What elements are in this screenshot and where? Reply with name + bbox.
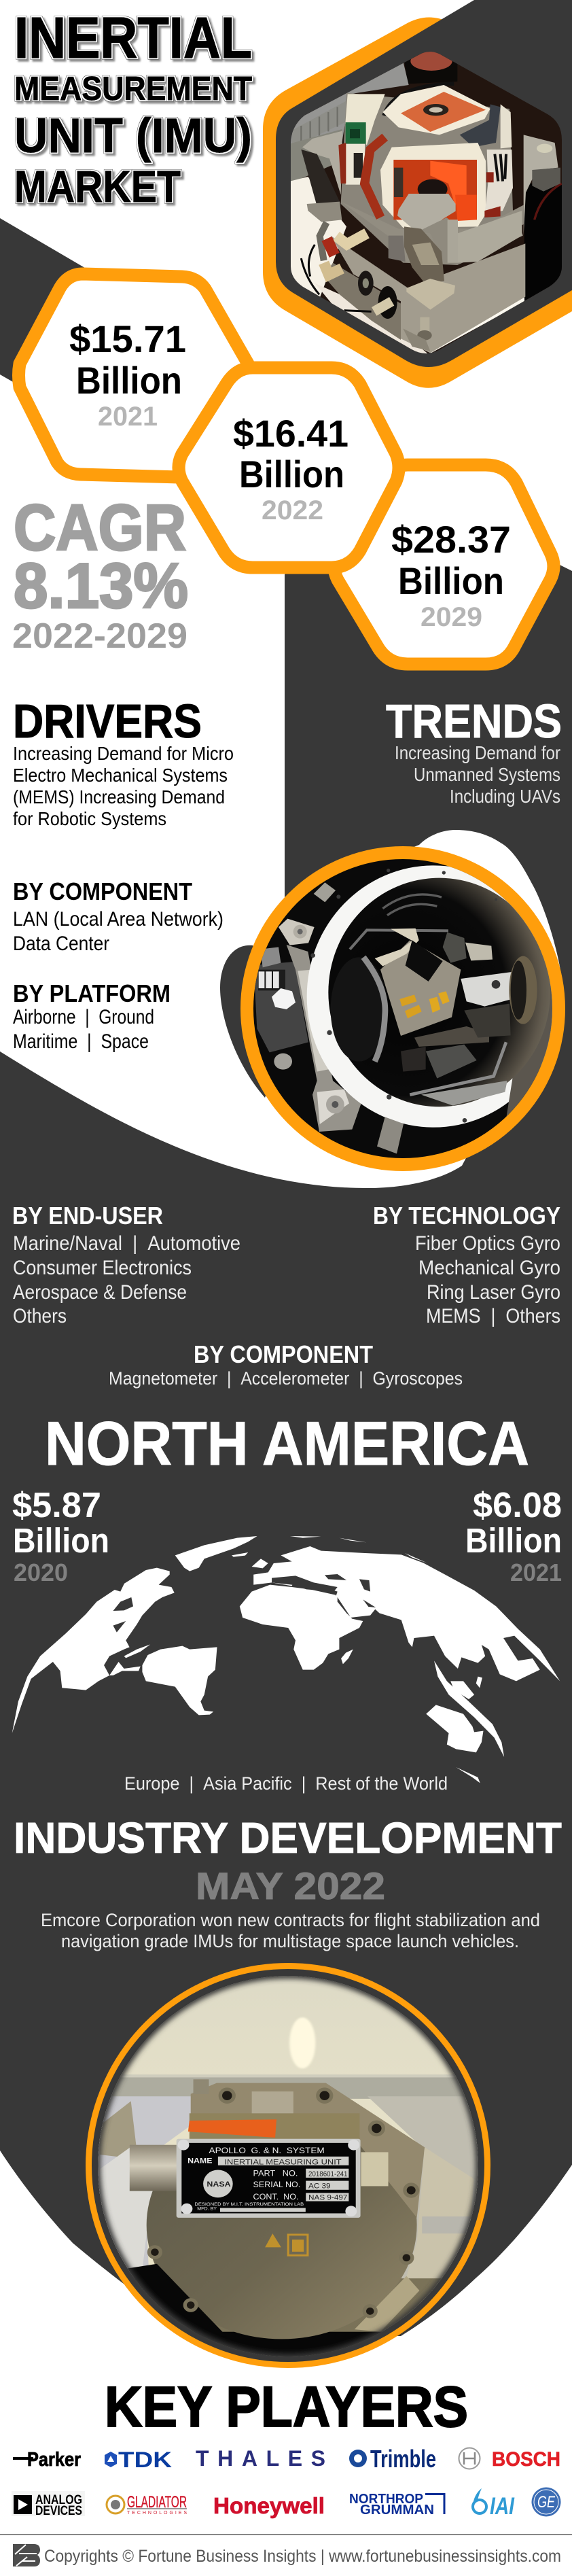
- dark blob left of circle: [220, 945, 292, 1098]
- industry development description: navigation grade IMUs for multistage space launch vehicles.: [61, 1931, 519, 1951]
- logo: IAI: [473, 2488, 515, 2520]
- key players heading: KEY PLAYERS: [105, 2375, 468, 2439]
- circular photo: Apollo IMU nameplate: NAS 9-497: [308, 2194, 347, 2201]
- circular photo: Apollo IMU nameplate: CONT. NO.: [253, 2192, 299, 2201]
- left dark triangle: [0, 218, 88, 383]
- circular photo: Apollo IMU nameplate: DESIGNED BY M.I.T. INSTRUMENTATION LAB: [194, 2202, 304, 2207]
- circular photo: Apollo IMU nameplate: APOLLO G. & N. SYSTEM: [209, 2146, 325, 2155]
- north america 2021 value: [465, 1486, 562, 1586]
- market size hexagon: 2021: $15.71: [69, 317, 186, 360]
- north america 2020 value: [12, 1486, 109, 1586]
- by end-user: Aerospace & Defense: [13, 1281, 187, 1304]
- circular photo: Apollo IMU nameplate: 2018601-241: [308, 2170, 347, 2178]
- logo: Northrop Grumman: NORTHROP: [349, 2492, 423, 2507]
- by component (network): LAN (Local Area Network): [13, 908, 224, 930]
- title: [14, 6, 252, 211]
- logo: Bosch: [459, 2448, 560, 2471]
- north america 2021 value: $6.08: [473, 1486, 562, 1525]
- market size hexagon: 2029: Billion: [398, 559, 504, 602]
- by platform: BY PLATFORM: [13, 979, 171, 1007]
- north america 2020 value: Billion: [13, 1521, 109, 1560]
- by technology: MEMS | Others: [426, 1305, 560, 1327]
- logo: General Electric: [531, 2488, 561, 2516]
- north america 2021 value: Billion: [465, 1521, 562, 1560]
- circular photo: Apollo IMU nameplate: AC 39: [308, 2182, 331, 2190]
- by component (sensors): Magnetometer | Accelerometer | Gyroscopes: [109, 1368, 463, 1389]
- north america 2021 value: 2021: [510, 1559, 562, 1586]
- by component (network): BY COMPONENT: [13, 877, 192, 905]
- market size hexagon: 2021: 2021: [98, 402, 158, 432]
- logo: Analog Devices: DEVICES: [35, 2504, 82, 2518]
- north america 2020 value: 2020: [14, 1559, 68, 1586]
- by end-user: Others: [13, 1305, 67, 1327]
- drivers: Increasing Demand for Micro: [13, 743, 234, 764]
- logo: IAI: IAI: [490, 2493, 515, 2520]
- trends: [386, 695, 562, 807]
- market size hexagon: 2022: [179, 368, 399, 568]
- by platform: Maritime | Space: [13, 1030, 149, 1053]
- by technology: Ring Laser Gyro: [427, 1281, 560, 1304]
- market size hexagon: 2022: Billion: [239, 453, 344, 495]
- logo: Bosch: BOSCH: [492, 2448, 560, 2471]
- circular photo: gimbal interior: [238, 843, 571, 1176]
- CAGR block: [12, 491, 188, 656]
- market size hexagon: 2022: 2022: [262, 495, 323, 525]
- market size hexagon: 2021: [19, 274, 251, 477]
- circular photo: Apollo IMU nameplate: MFD. BY: [197, 2207, 217, 2211]
- by platform: Airborne | Ground: [13, 1006, 154, 1028]
- title: MEASUREMENT: [14, 71, 252, 107]
- north america heading: NORTH AMERICA: [45, 1410, 529, 1478]
- logo: Northrop Grumman: GRUMMAN: [360, 2503, 434, 2518]
- circular photo: Apollo IMU nameplate: NAME: [187, 2156, 213, 2165]
- CAGR block: 2022-2029: [12, 616, 187, 656]
- by component (sensors): [109, 1340, 463, 1389]
- logo: Analog Devices: [12, 2491, 85, 2518]
- circular photo: Apollo IMU nameplate: SERIAL NO.: [253, 2180, 300, 2189]
- drivers: Electro Mechanical Systems: [13, 765, 228, 786]
- top right hexagon frame: [263, 0, 572, 388]
- drivers: (MEMS) Increasing Demand: [13, 786, 225, 807]
- footer divider: [0, 2534, 572, 2535]
- title: MARKET: [14, 161, 181, 211]
- logo: Trimble: Trimble: [370, 2445, 436, 2473]
- industry development description: [41, 1910, 540, 1951]
- north america 2020 value: $5.87: [12, 1486, 101, 1525]
- logo: Honeywell: Honeywell: [213, 2493, 325, 2518]
- by component (sensors): BY COMPONENT: [194, 1340, 373, 1368]
- date: MAY 2022: [196, 1864, 385, 1907]
- regions list: Europe | Asia Pacific | Rest of the World: [124, 1773, 448, 1794]
- logo: Thales: THALES: [196, 2446, 325, 2471]
- market size hexagon: 2022: $16.41: [233, 412, 348, 455]
- circular photo: Apollo IMU nameplate: INERTIAL MEASURING UNIT: [224, 2157, 342, 2166]
- by end-user: Consumer Electronics: [13, 1257, 192, 1279]
- drivers: for Robotic Systems: [13, 808, 166, 829]
- CAGR block: CAGR: [14, 491, 186, 564]
- circular photo: Apollo IMU nameplate: [82, 1951, 489, 2365]
- title: INERTIAL: [14, 6, 252, 71]
- logo: TDK: TDK: [118, 2448, 172, 2472]
- industry development heading: INDUSTRY DEVELOPMENT: [14, 1813, 562, 1862]
- CAGR block: 8.13%: [14, 550, 188, 621]
- drivers: [13, 695, 234, 829]
- market size hexagon: 2021: Billion: [76, 359, 182, 402]
- photo: IMU with gimbal in hexagon: [285, 48, 571, 360]
- market size hexagon: 2029: [334, 465, 554, 664]
- logo: Parker: Parker: [27, 2449, 81, 2471]
- footer logo: [13, 2544, 40, 2566]
- logo: Analog Devices: ANALOG: [35, 2493, 82, 2507]
- by end-user: Marine/Naval | Automotive: [13, 1232, 240, 1255]
- logo: Trimble: [349, 2445, 436, 2473]
- circular photo: Apollo IMU nameplate: PART NO.: [253, 2169, 298, 2178]
- logo: Gladiator Technologies: [107, 2493, 187, 2516]
- by technology: [373, 1202, 560, 1327]
- world map: [12, 1536, 560, 1783]
- by technology: Fiber Optics Gyro: [415, 1232, 560, 1255]
- dark background shape: [0, 503, 572, 2336]
- by technology: Mechanical Gyro: [418, 1257, 560, 1279]
- industry development description: Emcore Corporation won new contracts for flight stabilization and: [41, 1910, 540, 1930]
- by platform: [13, 979, 171, 1053]
- logo: TDK: [105, 2448, 172, 2472]
- market size hexagon: 2029: $28.37: [391, 518, 511, 561]
- logo: General Electric: GE: [537, 2493, 556, 2511]
- drivers: DRIVERS: [13, 695, 202, 748]
- market size hexagon: 2029: 2029: [421, 602, 482, 632]
- by component (network): Data Center: [13, 933, 109, 955]
- logo: Gladiator Technologies: TECHNOLOGIES: [127, 2511, 187, 2516]
- circular photo: Apollo IMU nameplate: NASA: [207, 2180, 231, 2189]
- by end-user: BY END-USER: [12, 1202, 163, 1230]
- logo: Gladiator Technologies: GLADIATOR: [127, 2493, 187, 2511]
- title: UNIT (IMU): [14, 109, 252, 163]
- by component (network): [13, 877, 224, 955]
- by end-user: [12, 1202, 240, 1327]
- logo: Northrop Grumman: [349, 2492, 444, 2518]
